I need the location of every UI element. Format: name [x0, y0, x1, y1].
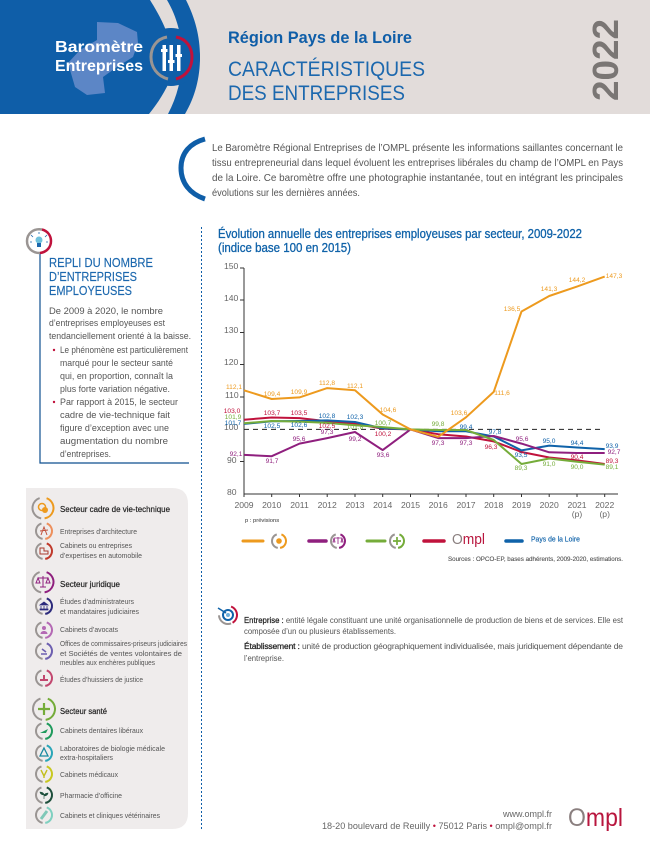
icon: laboratoires [34, 743, 54, 763]
axes: 2021 [567, 500, 587, 510]
panel: sectors [26, 488, 188, 829]
data labels: 96,3 [485, 444, 498, 451]
data labels: 136,5 [504, 306, 521, 313]
definition text: l’entreprise. [244, 653, 284, 663]
line chart [224, 261, 623, 519]
definitions [216, 603, 624, 663]
icon: cadre de vie [30, 495, 56, 521]
icon: médicaux [34, 764, 54, 784]
data labels: 147,3 [606, 273, 623, 280]
icon: target [216, 603, 240, 627]
key findings heading: EMPLOYEUSES [49, 284, 132, 298]
data labels: 102,5 [264, 423, 281, 430]
key findings body: Le phénomène est particulièrement [60, 345, 188, 356]
data labels: 103,6 [451, 410, 468, 417]
intro bracket [181, 139, 205, 199]
intro text [212, 142, 623, 199]
panel: key findings [27, 229, 191, 463]
icon: light bulb [27, 229, 51, 253]
data labels: 111,6 [494, 390, 510, 397]
data labels: 101,9 [225, 414, 242, 421]
data labels: 102,3 [347, 414, 364, 421]
data labels: 103,7 [264, 410, 281, 417]
data labels: 103,0 [224, 408, 241, 415]
data labels: 144,2 [569, 277, 586, 284]
base 100 reference line [244, 428, 604, 430]
data labels: 90,4 [571, 454, 584, 461]
main heading [228, 58, 425, 105]
axes: 2014 [373, 500, 392, 510]
sector: juridique: Études d’administrateurs [60, 597, 134, 606]
key findings heading [49, 256, 153, 298]
barometre title: Entreprises [55, 58, 143, 75]
data labels: 92,1 [230, 451, 243, 458]
chart title [218, 226, 582, 255]
data labels: 95,6 [293, 436, 306, 443]
sector: santé: Cabinets dentaires libéraux [60, 726, 143, 735]
axes: 140 [224, 293, 239, 303]
data labels [224, 273, 623, 472]
footer logo: Ompl [568, 804, 623, 832]
data labels: 90,0 [571, 464, 584, 471]
data labels: 92,7 [608, 449, 621, 456]
icon: scales [30, 569, 56, 595]
axes: 2016 [429, 500, 448, 510]
legend: OMPL [424, 531, 485, 548]
icon: administrateurs [34, 596, 54, 616]
icon: dentaires [34, 721, 54, 741]
definition text [244, 615, 624, 663]
sector: juridique: Études d’huissiers de justice [60, 675, 143, 684]
key findings heading: REPLI DU NOMBRE [49, 256, 153, 270]
sector: santé: Cabinets et cliniques vétérinaires [60, 811, 160, 820]
data labels: 91,0 [543, 461, 556, 468]
legend: OMPL: Ompl [452, 531, 485, 548]
data labels: 100,2 [375, 431, 392, 438]
data labels: 101,7 [225, 420, 242, 427]
axes: (p) [599, 509, 610, 519]
sector: santé: Laboratoires de biologie médicale [60, 744, 165, 753]
key findings body: tendanciellement orienté à la baisse. [49, 331, 191, 342]
data labels: 100,7 [375, 420, 392, 427]
axes: 110 [225, 390, 239, 400]
sector: santé: Secteur santé [60, 707, 108, 716]
key findings body: d’entreprises. [60, 449, 111, 460]
axes: 90 [227, 455, 237, 465]
year: 2022 [585, 19, 626, 101]
chart legend [243, 531, 580, 550]
key findings heading: D’ENTREPRISES [49, 270, 137, 284]
intro text: de la Loire. Ce baromètre offre une photographie instantanée, tout en intégrant les principales [212, 172, 623, 184]
axes: 2022 [595, 500, 614, 510]
chart title: Évolution annuelle des entreprises employeuses par secteur, 2009-2022 [218, 226, 582, 241]
axes: 2009 [234, 500, 254, 510]
sector: cadre de vie-technique: Entreprises d’architecture [60, 527, 137, 536]
series: OMPL [244, 418, 605, 464]
data labels: 102,5 [319, 423, 336, 430]
sector: cadre de vie-technique: Cabinets ou entreprises [60, 541, 132, 550]
icon: architecture [34, 521, 54, 541]
data labels: 93,6 [377, 452, 390, 459]
data labels: 89,3 [515, 465, 528, 472]
data labels: 102,6 [291, 422, 308, 429]
sector: juridique: Cabinets d’avocats [60, 625, 118, 634]
axes: 2010 [262, 500, 281, 510]
data labels: 89,1 [606, 464, 619, 471]
axes [224, 261, 618, 519]
definition text: Entreprise : entité légale constituant une unité organisationnelle de production de biens et de services. Elle est [244, 615, 624, 625]
icon: avocats [34, 620, 54, 640]
data labels: 97,8 [489, 429, 502, 436]
legend: santé [367, 532, 406, 550]
data labels: 104,6 [380, 407, 397, 414]
key findings body: De 2009 à 2020, le nombre [49, 306, 163, 317]
intro text: tissu entrepreneurial dans lequel évoluent les entreprises libérales du champ de l’OMPL en Pays [212, 157, 623, 169]
icon: pharmacie [34, 785, 54, 805]
series: cadre de vie-technique [244, 277, 605, 437]
footer address [322, 809, 552, 832]
data labels: 95,6 [516, 436, 529, 443]
icon: commissaires-priseurs [34, 641, 54, 661]
series: Pays de la Loire [244, 420, 605, 450]
sector: cadre de vie-technique [30, 495, 171, 561]
sector: cadre de vie-technique: Secteur cadre de vie-technique [60, 505, 171, 514]
series: juridique [244, 429, 605, 456]
header band [0, 0, 650, 114]
chart title: (indice base 100 en 2015) [218, 241, 351, 255]
sector: juridique: et mandataires judiciaires [60, 607, 139, 616]
axes: 130 [224, 325, 239, 335]
sector: juridique: Offices de commissaires-priseurs judiciaires [60, 639, 187, 648]
data labels: 112,1 [226, 384, 242, 391]
data labels: 101,8 [347, 424, 364, 431]
header blue shape with logo [0, 0, 200, 114]
data labels: 97,3 [460, 440, 473, 447]
sector: juridique: Secteur juridique [60, 580, 121, 589]
axes: 120 [224, 357, 239, 367]
key findings body: d’entreprises employeuses est [49, 318, 165, 329]
footer address: 18-20 boulevard de Reuilly • 75012 Paris • ompl@ompl.fr [322, 821, 552, 832]
icon: huissiers [34, 668, 54, 688]
map of the region [68, 22, 138, 95]
barometre title: Baromètre [55, 39, 143, 56]
axes: 100 [224, 422, 239, 432]
sources: Sources : OPCO-EP, bases adhérents, 2009-2020, estimations. [448, 556, 623, 563]
key findings body: Par rapport à 2015, le secteur [60, 397, 179, 408]
data labels: 89,3 [606, 458, 619, 465]
bullets [53, 349, 55, 403]
key findings body [49, 306, 191, 460]
main heading: DES ENTREPRISES [228, 82, 405, 105]
data labels: 141,3 [541, 286, 558, 293]
sector: santé [30, 695, 165, 825]
region heading: Région Pays de la Loire [228, 29, 412, 47]
axes: 2012 [318, 500, 337, 510]
key findings body: plus forte variation négative. [60, 384, 170, 395]
sector: juridique: et Sociétés de ventes volontaires de [60, 649, 182, 658]
data labels: 99,4 [460, 424, 473, 431]
axes: 2018 [484, 500, 503, 510]
data labels: 112,1 [347, 383, 363, 390]
sector: juridique: meubles aux enchères publiques [60, 658, 155, 667]
data labels: 94,4 [571, 440, 584, 447]
axes: 2017 [456, 500, 476, 510]
legend: juridique [309, 532, 347, 550]
sector: santé: extra-hospitaliers [60, 753, 113, 762]
legend: Pays de la Loire: Pays de la Loire [531, 534, 580, 544]
data labels: 93,5 [515, 452, 528, 459]
data labels: 112,8 [319, 380, 335, 387]
data labels: 99,8 [432, 421, 445, 428]
key findings body: marqué pour le secteur santé [60, 358, 173, 369]
barometer icon [151, 37, 192, 79]
axes: 2019 [512, 500, 531, 510]
icon: plus [30, 695, 58, 723]
data labels: 109,9 [291, 389, 308, 396]
data labels: 97,3 [321, 429, 334, 436]
data labels: 103,5 [291, 410, 308, 417]
sector: santé: Cabinets médicaux [60, 770, 118, 779]
sector: cadre de vie-technique: d’expertises en automobile [60, 551, 142, 560]
data labels: 99,2 [349, 436, 362, 443]
footer address: www.ompl.fr [502, 809, 552, 820]
definition text: Établissement : unité de production géographiquement individualisée, mais juridiquement dépendante de [244, 641, 623, 651]
data labels: 93,9 [606, 443, 619, 450]
series: santé [244, 421, 605, 465]
dashed column divider [200, 227, 202, 829]
data labels: 102,8 [319, 413, 336, 420]
legend: cadre de vie-technique [243, 532, 288, 550]
data labels: 91,7 [266, 458, 279, 465]
icon: vétérinaires [34, 805, 54, 825]
main heading: CARACTÉRISTIQUES [228, 58, 425, 81]
legend: Pays de la Loire [506, 534, 580, 544]
icon: automobile [34, 541, 54, 561]
data labels: 97,3 [432, 440, 445, 447]
axes: 2013 [345, 500, 365, 510]
key findings body: figure d’exception avec une [60, 423, 169, 434]
axes: (p) [572, 509, 582, 519]
key findings body: qui, en proportion, connaît la [60, 371, 174, 382]
data labels: 109,4 [264, 391, 281, 398]
key findings body: cadre de vie-technique fait [60, 410, 170, 421]
intro text: évolutions sur les dernières années. [212, 187, 360, 199]
data labels: 95,0 [543, 438, 556, 445]
axes: 2015 [401, 500, 420, 510]
intro text: Le Baromètre Régional Entreprises de l’OMPL présente les informations saillantes concernant le [212, 142, 623, 154]
definition text: composée d’un ou plusieurs établissements. [244, 626, 396, 636]
barometre title [55, 39, 143, 75]
sector: santé: Pharmacie d’officine [60, 791, 122, 800]
sector: juridique [30, 569, 187, 688]
axes: 150 [224, 261, 239, 271]
key findings body: augmentation du nombre [60, 436, 168, 447]
previsions note: p : prévisions [245, 518, 279, 524]
axes: 2011 [290, 500, 309, 510]
axes: 2020 [540, 500, 559, 510]
axes: 80 [227, 487, 237, 497]
